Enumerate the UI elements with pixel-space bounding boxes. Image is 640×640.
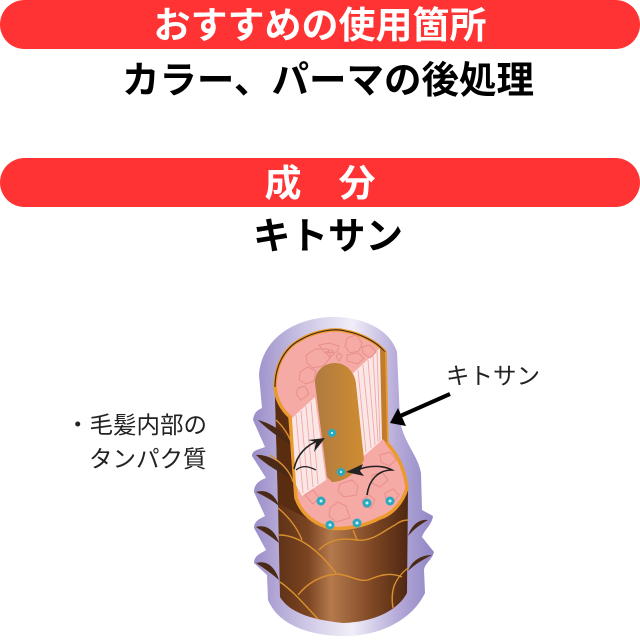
cortex: cell outlines xyxy=(296,335,399,522)
heading: recommended use xyxy=(0,0,640,49)
cut surface: dark rim xyxy=(275,330,385,387)
heading: ingredients: 成 分 xyxy=(264,163,376,204)
text: chitosan: キトサン xyxy=(253,215,403,257)
text: use description: カラー、パーマの後処理 xyxy=(122,59,534,101)
hair: dark inner edge xyxy=(275,395,310,520)
heading: recommended use: おすすめの使用箇所 xyxy=(154,5,486,46)
cut surface: right cortex shade xyxy=(379,347,387,443)
label: chitosan: キトサン xyxy=(446,363,540,389)
arrow: pointer to hair xyxy=(390,394,450,426)
arrow: curved ingress right xyxy=(346,464,392,495)
fibres: left striped band xyxy=(292,397,326,496)
fibres: right striped band xyxy=(350,348,382,456)
medulla: central core xyxy=(315,363,364,482)
cut surface: pink cortex xyxy=(275,330,407,529)
dots: chitosan particles xyxy=(318,430,393,528)
cuticle: spikes xyxy=(256,420,432,580)
cuticle: scale lines xyxy=(270,420,408,619)
heading: ingredients xyxy=(0,158,640,207)
label: hair protein: ・毛髪内部の xyxy=(66,412,207,438)
halo: lavender outline xyxy=(252,317,434,636)
label: hair protein xyxy=(66,412,207,472)
hair: brown cortex cylinder xyxy=(275,395,408,623)
arrow: curved ingress left xyxy=(294,438,325,470)
label: hair protein: タンパク質 xyxy=(89,446,206,472)
fibres: stripe lines xyxy=(296,351,380,493)
